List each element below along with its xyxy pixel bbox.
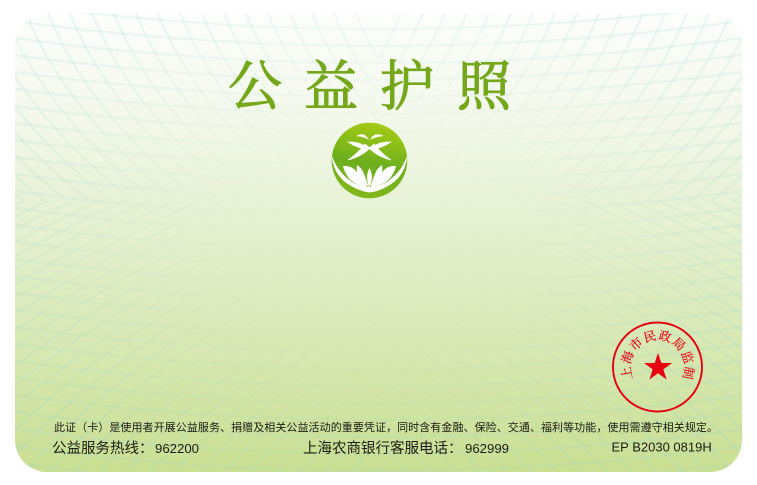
charity hotline: 962200 [155,441,199,456]
icon: green charity logo [332,123,408,198]
title: 益 [304,57,358,117]
title: 公 [228,57,282,117]
icon: white lotus petals [343,165,396,188]
bank service hotline: 962999 [465,441,509,456]
icon: two white figures [348,135,391,160]
charity hotline: 公益服务热线： [52,441,154,457]
seal text: 政 [657,328,673,345]
seal text: 海 [619,349,637,366]
seal text: 制 [680,365,697,381]
seal star [644,353,672,380]
bank service hotline: 上海农商银行客服电话： [303,441,462,457]
seal text: 局 [669,335,688,354]
icon: white crescent around lotus [332,155,408,192]
seal text: 上 [618,365,635,381]
seal text [618,328,697,381]
seal stamp [613,322,702,412]
seal ring [613,322,702,412]
card serial number: EP B2030 0819H [612,440,712,454]
seal text: 民 [642,329,658,345]
title: 护 [380,57,434,117]
seal text: 监 [678,349,697,366]
seal text: 市 [627,335,646,354]
title: 照 [457,57,512,117]
title [228,57,512,117]
usage statement: 此证（卡）是使用者开展公益服务、捐赠及相关公益活动的重要凭证，同时含有金融、保险、交通、福利等功能，使用需遵守相关规定。 [54,420,718,434]
